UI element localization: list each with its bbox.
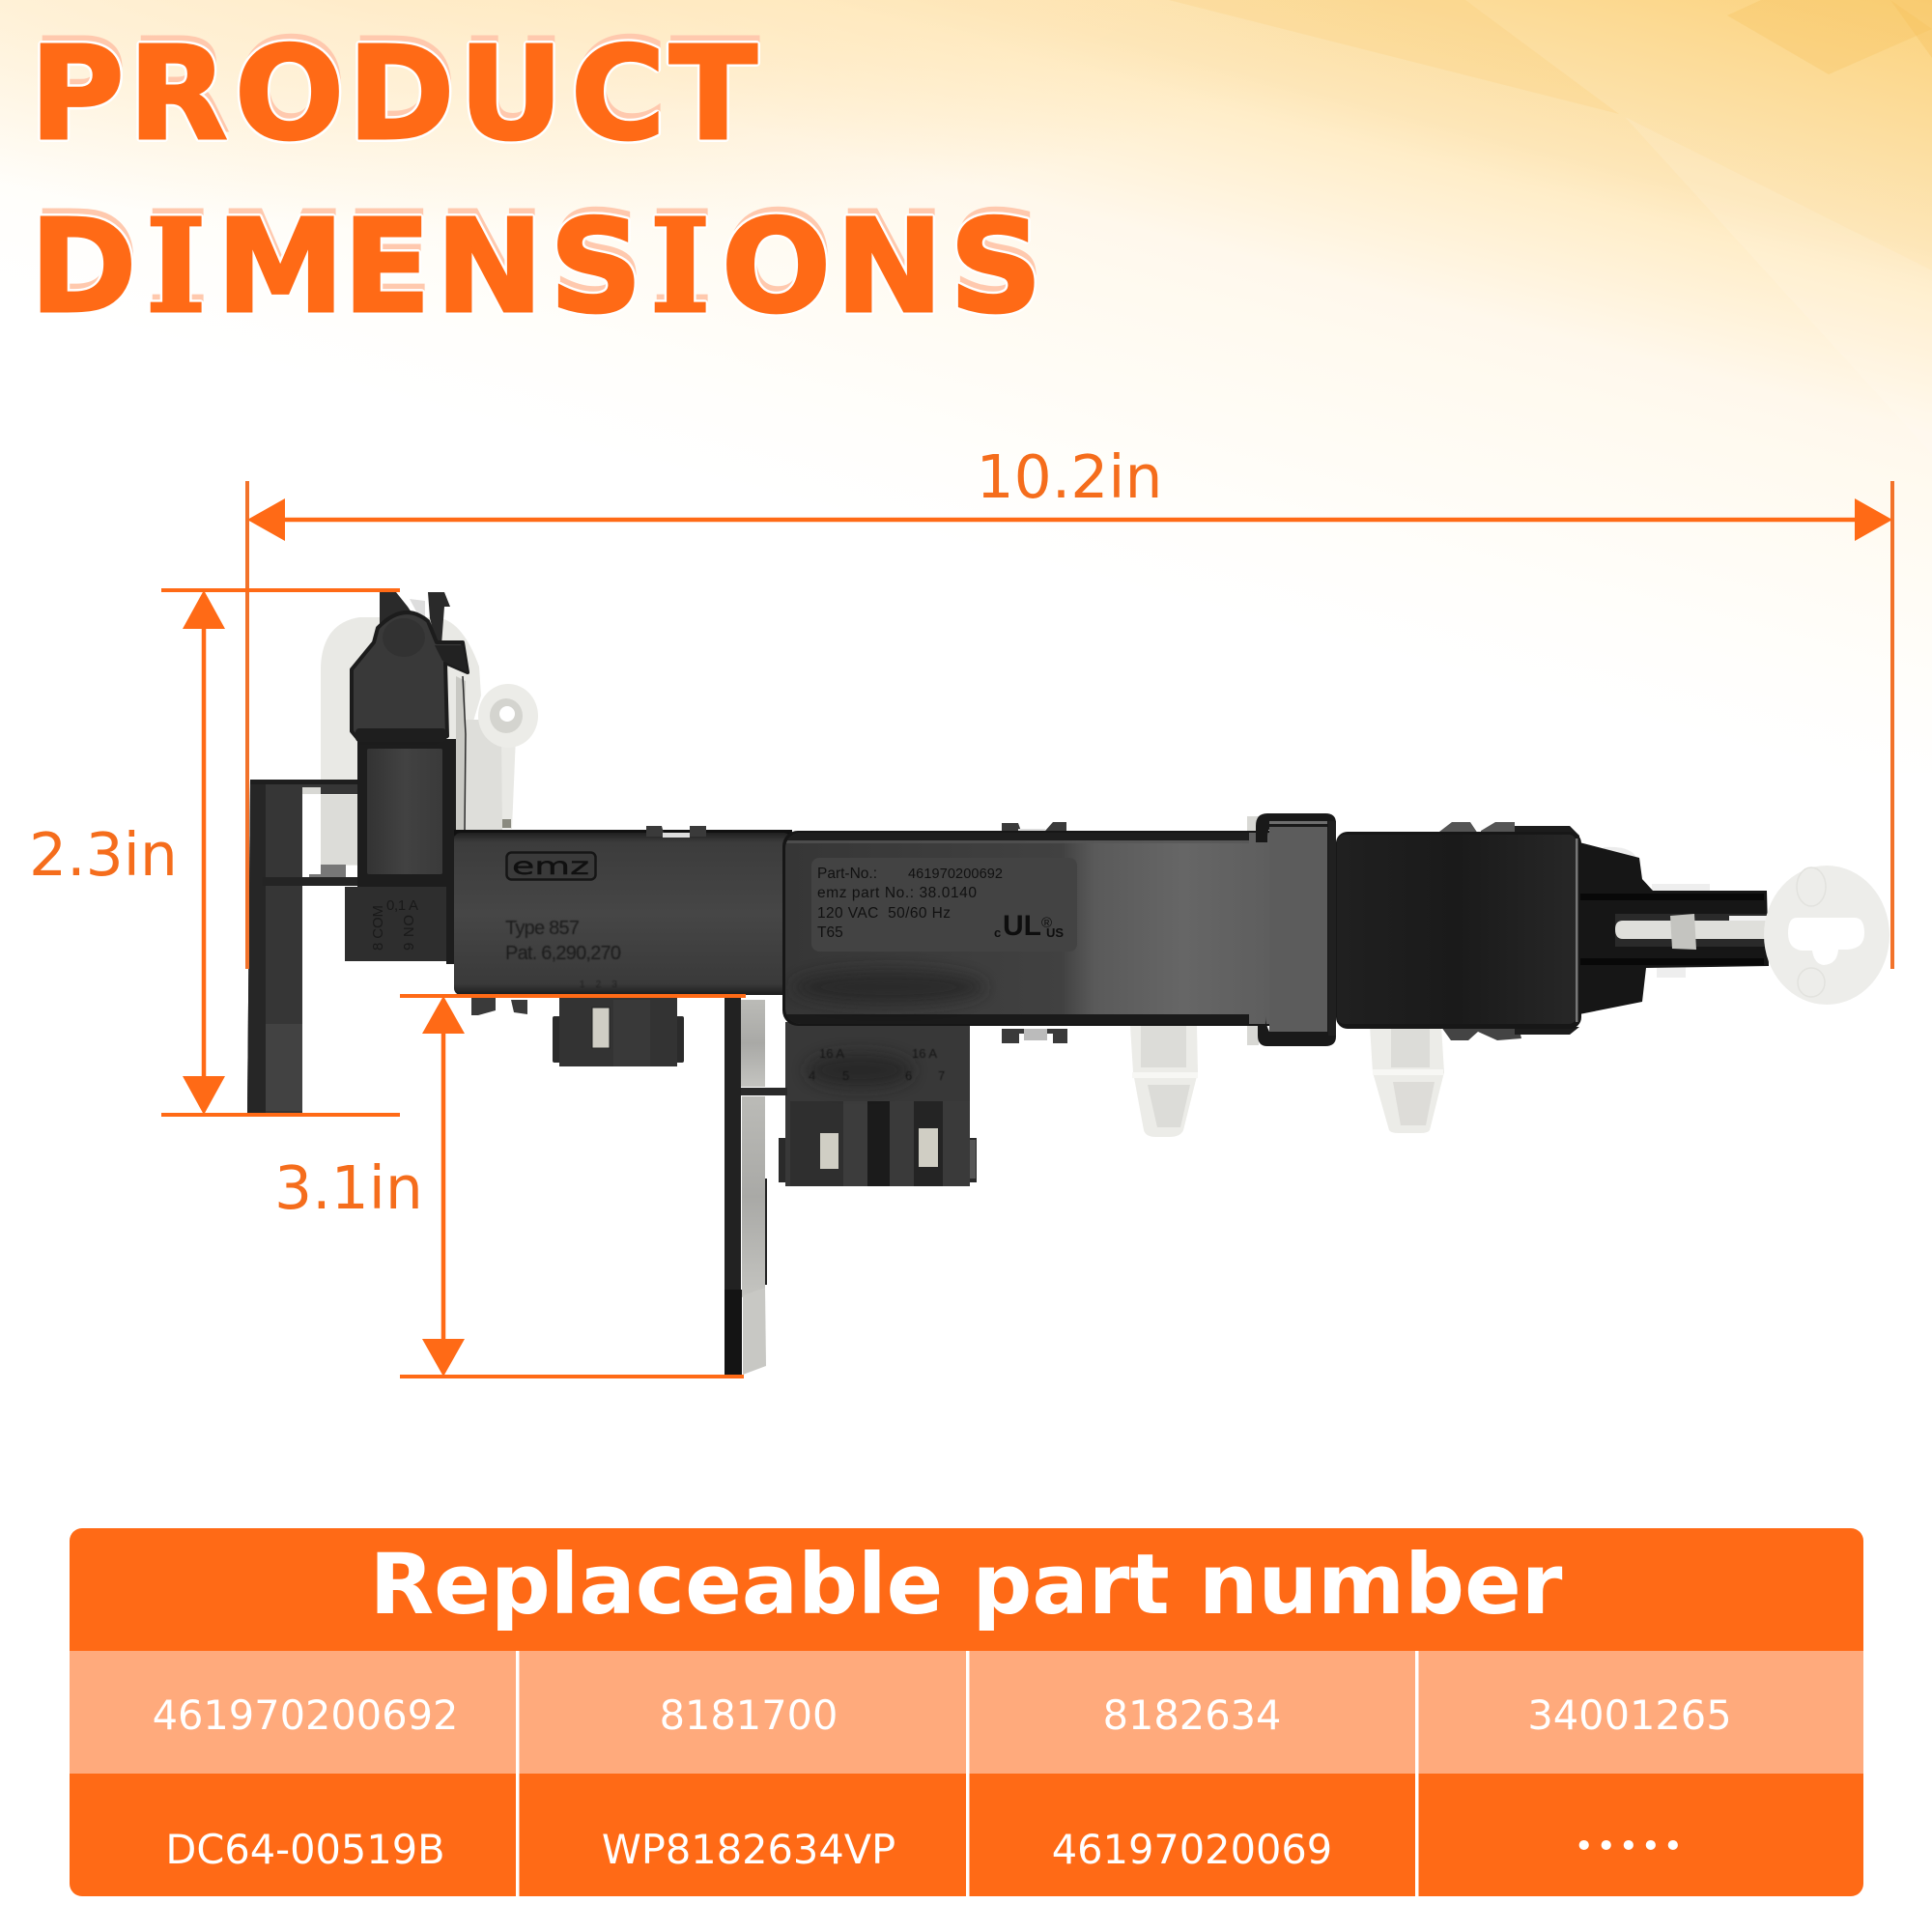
- dimension: height 3.1in: 3.1in: [274, 1153, 423, 1223]
- plunger rod: [1615, 914, 1773, 950]
- emz logo: [506, 852, 595, 880]
- title line 1: PRODUCT: [30, 20, 757, 169]
- lower switch block with labels: 0,1 A: [386, 897, 418, 914]
- title line 2: D: [32, 185, 138, 334]
- terminal labels: [809, 1046, 945, 1083]
- vertical clip bar B: [724, 998, 787, 1375]
- table background: [70, 1528, 1863, 1896]
- dimension: height 2.3in: [29, 590, 400, 1115]
- terminal labels: 6: [905, 1068, 912, 1083]
- title line 2: M: [218, 185, 346, 334]
- title line 1: PRODUCT: [30, 20, 757, 169]
- title: PRODUCT DIMENSIONS: [30, 13, 1044, 342]
- title line 2: M: [216, 193, 344, 342]
- white round hook: [478, 684, 538, 829]
- snap clip 2: [1370, 1026, 1444, 1133]
- title line 2: I: [650, 191, 710, 342]
- title line 2: E: [343, 193, 431, 342]
- lower switch block with labels: 8 COM: [370, 905, 386, 951]
- title line 2: [30, 184, 1044, 342]
- title line 2: E: [345, 185, 433, 334]
- row 2 part numbers: 46197020069: [1052, 1826, 1332, 1873]
- title line 2: S: [950, 193, 1042, 342]
- UL mark: c: [994, 925, 1001, 940]
- left clip bar: [247, 780, 357, 1113]
- title line 2: N: [836, 193, 943, 342]
- title line 2: S: [950, 193, 1042, 342]
- title line 2: I: [146, 191, 206, 342]
- title line 2: I: [148, 184, 208, 334]
- title line 2: E: [343, 193, 431, 342]
- collar light edges: [1247, 816, 1259, 1045]
- table: replaceable part number: [70, 1528, 1863, 1896]
- title line 2: S: [550, 193, 642, 342]
- title line 2: M: [216, 193, 344, 342]
- key disc: [1764, 866, 1889, 1005]
- terminal labels: 4: [809, 1068, 815, 1083]
- emz logo: emz: [512, 852, 589, 880]
- center collar: [1256, 813, 1336, 1046]
- label plate: Part-No.:: [817, 866, 877, 882]
- title line 1: PRODUCT: [32, 13, 759, 161]
- molded text: Pat. 6,290,270: [505, 943, 621, 964]
- row 1 part numbers: 461970200692: [153, 1691, 458, 1739]
- title line 2: I: [650, 191, 710, 342]
- title line 2: D: [30, 193, 136, 342]
- terminal labels: 5: [842, 1068, 849, 1083]
- dimension: height 2.3in: 2.3in: [29, 820, 178, 890]
- title line 2: O: [722, 193, 831, 342]
- row 2 part numbers: [165, 1826, 1686, 1873]
- label plate: 461970200692: [908, 867, 1003, 882]
- label plate: [811, 858, 1077, 952]
- connector A: [553, 995, 684, 1066]
- small clips along the body: [471, 822, 1579, 1043]
- title line 2: N: [438, 185, 545, 334]
- title line 2: S: [952, 185, 1044, 334]
- terminal labels: 16 A: [912, 1046, 937, 1061]
- row 1 part numbers: 8182634: [1103, 1691, 1281, 1739]
- molded text: Type 857: [505, 918, 580, 939]
- title line 2: I: [652, 184, 712, 334]
- title line 2: I: [146, 191, 206, 342]
- dimension: width 10.2in: 10.2in: [976, 442, 1163, 512]
- white rear latch housing: [321, 617, 538, 866]
- black rear section: [1336, 832, 1581, 1029]
- UL mark: ®: [1041, 915, 1052, 931]
- row 2 part numbers: •••••: [1574, 1828, 1686, 1866]
- title line 2: N: [838, 185, 945, 334]
- row 1 part numbers: 34001265: [1527, 1691, 1732, 1739]
- table heading: Replaceable part number: [370, 1537, 1563, 1634]
- row 2 part numbers: DC64-00519B: [165, 1826, 445, 1873]
- black switch cap and column: [352, 612, 468, 887]
- column dividers: [516, 1651, 1418, 1896]
- row 2 part numbers: WP8182634VP: [602, 1826, 895, 1873]
- molded text: 1 2 3: [580, 980, 617, 990]
- lower switch block with labels: [345, 887, 456, 964]
- terminal labels: 16 A: [819, 1046, 844, 1061]
- plunger housing: [1579, 842, 1773, 1014]
- lower switch block with labels: 9 NO: [401, 915, 417, 951]
- title line 2: N: [836, 193, 943, 342]
- title line 2: O: [722, 193, 831, 342]
- title line 2: S: [550, 193, 642, 342]
- terminal labels: 7: [938, 1068, 945, 1083]
- body section 2 with label plate: [782, 831, 1337, 1026]
- title line 2: D: [30, 193, 136, 342]
- snap clip 1: [1130, 1026, 1198, 1137]
- row 1 part numbers: [153, 1691, 1732, 1739]
- label plate: 120 VAC 50/60 Hz: [817, 905, 951, 922]
- main body left section: [454, 830, 792, 995]
- row 1 part numbers: 8181700: [660, 1691, 838, 1739]
- title line 2: S: [552, 185, 644, 334]
- label plate: T65: [817, 924, 843, 941]
- title line 2: O: [724, 185, 833, 334]
- white snap clips: [1130, 1026, 1444, 1137]
- molded text: [505, 918, 621, 990]
- UL mark: [994, 910, 1064, 942]
- label plate: emz part No.: 38.0140: [817, 885, 977, 901]
- top clips: [380, 592, 450, 645]
- product: washer door lock switch: [247, 592, 1889, 1375]
- title line 2: N: [436, 193, 543, 342]
- light row band: [70, 1651, 1863, 1774]
- UL mark: US: [1046, 925, 1064, 940]
- title line 2: N: [436, 193, 543, 342]
- dimension: height 3.1in: [274, 996, 746, 1377]
- connector C with terminals: [779, 1022, 977, 1186]
- dimension: width 10.2in: [247, 442, 1892, 969]
- UL mark: UL: [1003, 910, 1041, 942]
